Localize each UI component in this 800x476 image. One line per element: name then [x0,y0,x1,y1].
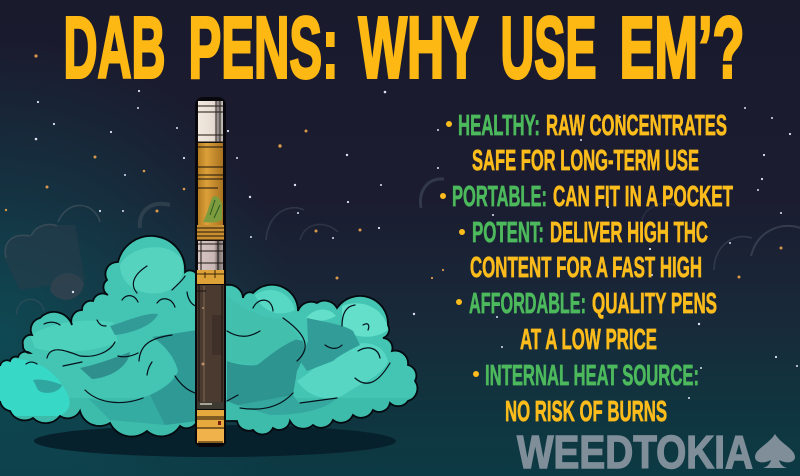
background smoke clouds [5,179,800,315]
item: affordable: QUALITY PENS [592,288,717,320]
item: healthy [446,110,727,177]
grey ring [197,402,224,409]
item: internal heat source [473,360,699,428]
item: potent [459,217,708,284]
benefits list [440,110,733,428]
item: affordable [456,288,717,356]
orange stars [5,54,783,280]
item: potent: POTENT: [472,217,544,249]
title: DAB [64,0,166,96]
item: internal heat source: NO RISK OF BURNS [505,396,667,428]
title: PENS: [188,0,338,96]
silver collar [198,241,223,274]
icon: spade [755,434,795,468]
title: WHY [358,0,478,96]
battery body [197,285,224,404]
cloud colour shading [0,247,420,438]
chamber bands and oil [198,101,223,222]
stars [35,90,798,399]
pen outline [195,97,226,447]
cloud body [0,236,417,437]
gold chamber [198,143,223,225]
item: portable [440,181,733,213]
item: portable: PORTABLE: [452,181,547,213]
dab pen [195,97,226,447]
cloud ink lines [26,266,390,409]
smoke cloud [0,236,420,438]
ground shadow [34,425,396,457]
gold ring [197,225,224,240]
gold base [197,410,224,443]
item: affordable: AFFORDABLE: [469,288,586,320]
cloud outline [0,236,417,437]
item: healthy: HEALTHY: [458,110,540,142]
title [64,0,744,96]
item: affordable: AT A LOW PRICE [520,324,657,356]
title: USE [500,0,596,96]
silver tip [198,101,223,142]
gold connector [197,270,224,284]
